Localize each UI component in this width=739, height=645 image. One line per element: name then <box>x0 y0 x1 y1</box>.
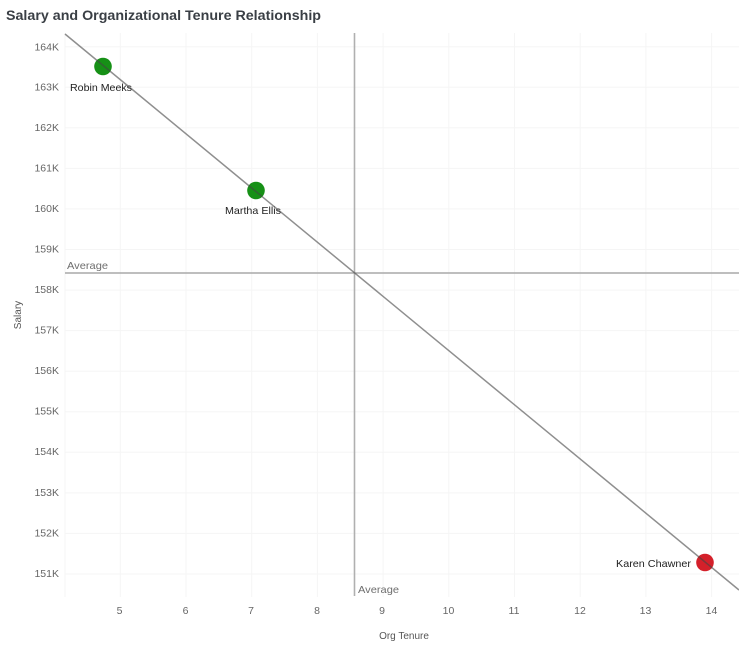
point: Robin Meeks <box>70 58 132 94</box>
y axis labels: 151K <box>34 568 59 580</box>
x axis labels: 10 <box>443 605 454 617</box>
y axis labels: 155K <box>34 406 59 418</box>
point: Martha Ellis: Martha Ellis <box>225 205 281 217</box>
x axis title: Org Tenure <box>379 631 429 642</box>
y axis labels <box>34 42 59 580</box>
y axis labels: 163K <box>34 82 59 94</box>
x axis labels: 9 <box>379 605 385 617</box>
y axis labels: 164K <box>34 42 59 54</box>
point: Robin Meeks: Robin Meeks <box>70 82 132 94</box>
y axis labels: 153K <box>34 487 59 499</box>
y axis labels: 152K <box>34 528 59 540</box>
trend line <box>65 34 739 590</box>
y axis labels: 159K <box>34 244 59 256</box>
x axis labels <box>117 605 717 617</box>
x axis labels: 7 <box>248 605 254 617</box>
x axis labels: 12 <box>574 605 586 617</box>
x axis labels: 6 <box>183 605 189 617</box>
point: Martha Ellis <box>225 182 281 217</box>
average line: org tenure: Average <box>358 584 399 596</box>
y axis labels: 162K <box>34 122 59 134</box>
y axis labels: 154K <box>34 446 59 458</box>
x axis labels: 8 <box>314 605 320 617</box>
x axis labels: 11 <box>509 605 520 617</box>
y axis labels: 158K <box>34 284 59 296</box>
y axis labels: 160K <box>34 203 59 215</box>
title: Salary and Organizational Tenure Relationship <box>6 8 321 23</box>
point: Karen Chawner: Karen Chawner <box>616 558 692 570</box>
x axis labels: 14 <box>706 605 717 617</box>
y axis labels: 157K <box>34 324 59 336</box>
point: Karen Chawner <box>616 554 714 571</box>
x axis labels: 5 <box>117 605 123 617</box>
y axis title: Salary <box>13 301 24 329</box>
y axis labels: 156K <box>34 365 59 377</box>
average line: salary: Average <box>67 260 108 272</box>
y axis labels: 161K <box>34 162 59 174</box>
x axis labels: 13 <box>640 605 651 617</box>
